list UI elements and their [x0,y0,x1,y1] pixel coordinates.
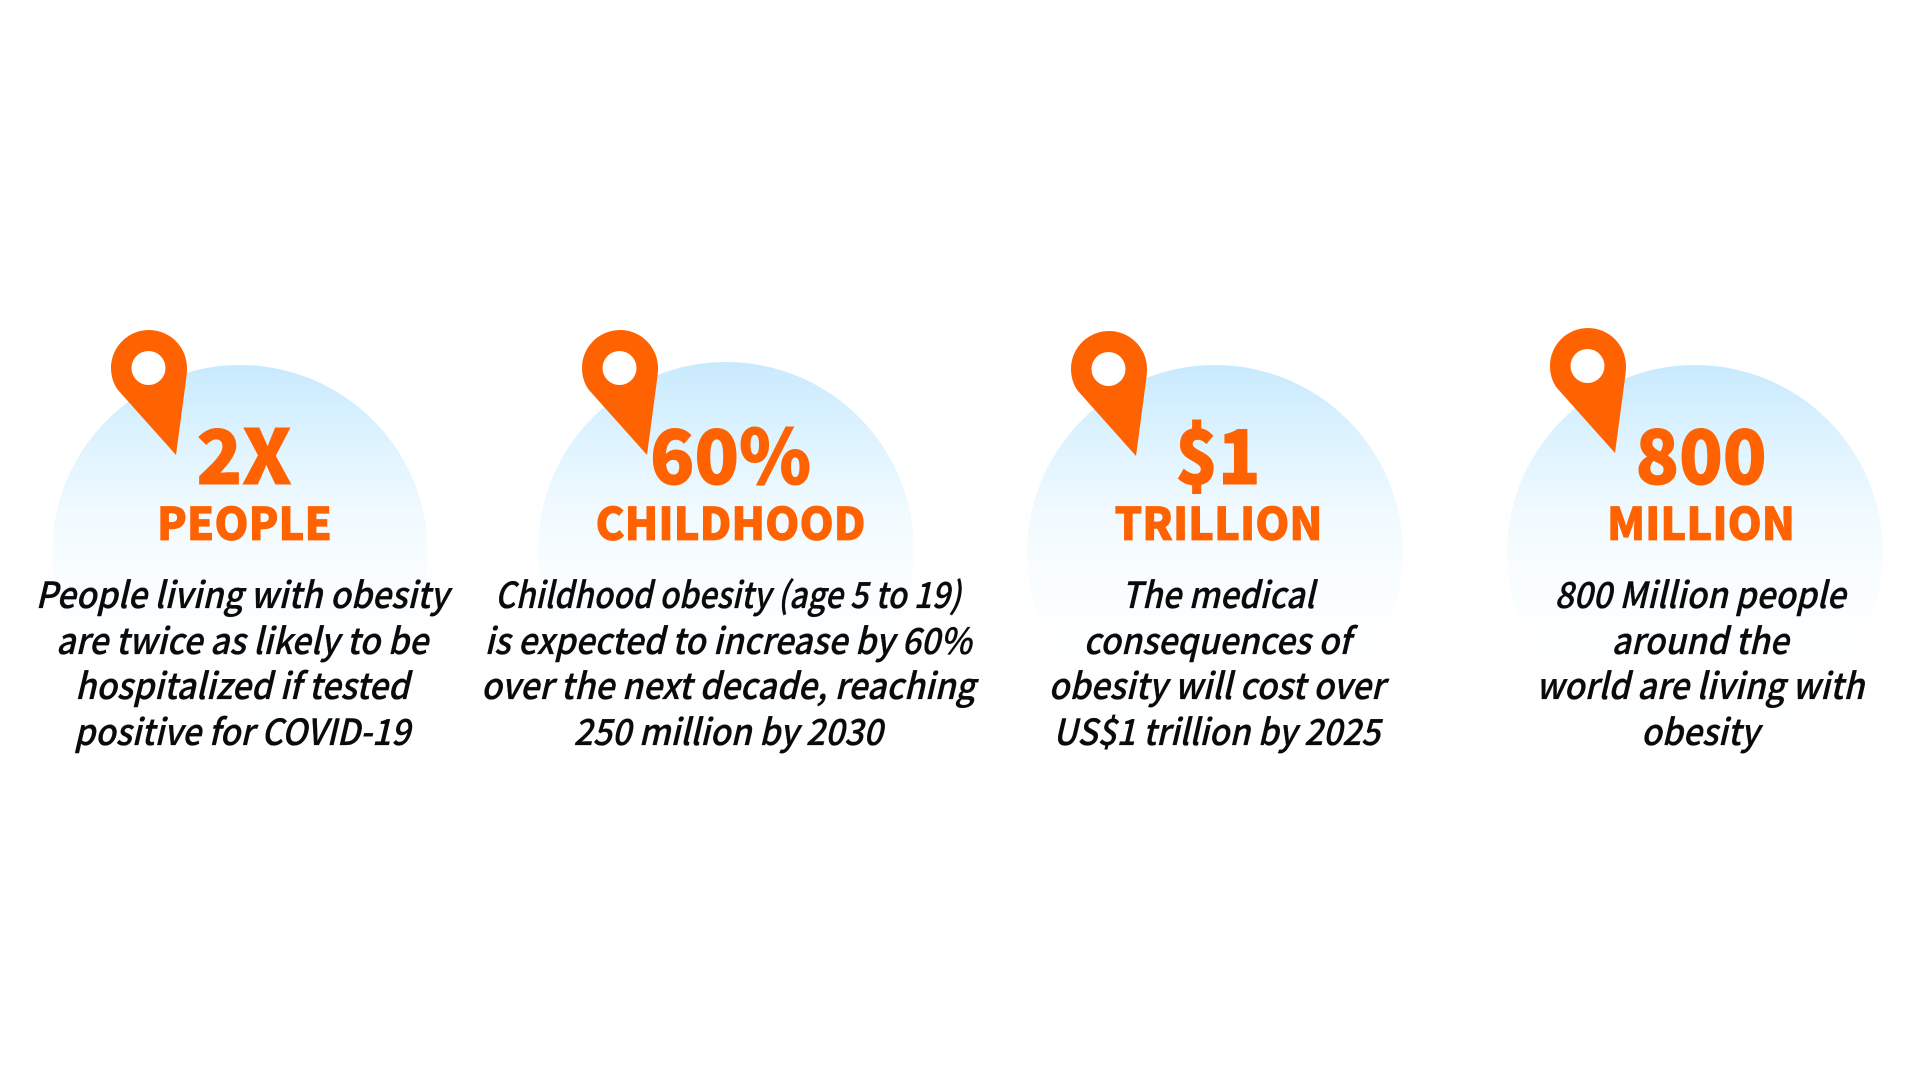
panel: $1 trillion [1027,331,1403,756]
description [1048,567,1389,756]
description [481,567,979,756]
label: MILLION [1607,488,1795,553]
description [1536,567,1866,756]
icon: map pin [1071,331,1147,456]
description: is expected to increase by 60% [484,613,974,665]
big number: 2X [196,397,292,506]
panel: 800 million [1507,328,1883,756]
description: world are living with [1536,658,1866,710]
description [36,567,454,756]
description: Childhood obesity (age 5 to 19) [495,567,963,619]
description: 800 Million people [1554,567,1848,619]
background circle [1507,365,1883,741]
description: over the next decade, reaching [481,658,979,710]
description: consequences of [1084,613,1358,665]
description: The medical [1122,567,1318,619]
description: obesity will cost over [1048,658,1389,710]
label: CHILDHOOD [596,488,866,553]
description: 250 million by 2030 [574,704,887,756]
background circle [538,362,914,738]
big number: 60% [650,397,811,506]
icon: map pin [1550,328,1626,453]
icon: map pin [111,330,187,455]
icon: map pin [582,330,658,455]
description: around the [1612,613,1791,665]
description: positive for COVID-19 [74,704,414,756]
description: People living with obesity [36,567,454,619]
big number: $1 [1176,397,1260,506]
description: US$1 trillion by 2025 [1053,704,1383,756]
panel: 2X people [36,330,454,756]
background circle [1027,365,1403,741]
description: obesity [1641,704,1764,756]
description: hospitalized if tested [75,658,413,710]
description: are twice as likely to be [56,613,430,665]
label: PEOPLE [157,488,332,553]
background circle [52,365,428,741]
label: TRILLION [1114,488,1322,553]
panel: 60% childhood [481,330,979,756]
big number: 800 [1636,397,1766,506]
